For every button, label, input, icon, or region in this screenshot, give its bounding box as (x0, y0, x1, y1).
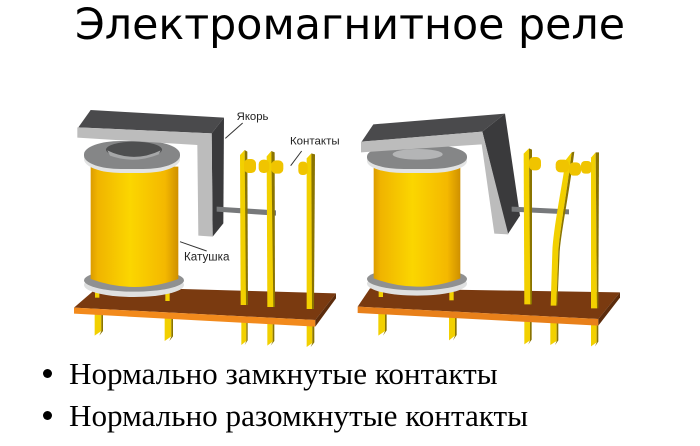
label: armature (225, 111, 269, 138)
bullet: normally closed contacts: Нормально замкнутые контакты (69, 356, 498, 391)
label: coil (180, 242, 230, 263)
coil (367, 145, 467, 296)
actuator rod (512, 207, 569, 214)
contact springs and contacts (524, 148, 599, 308)
upper pins (95, 292, 170, 301)
label: coil: Катушка (184, 250, 230, 263)
contact springs and contacts (240, 150, 315, 309)
label: armature: Якорь (237, 111, 269, 123)
diagram: normally closed relay (74, 110, 340, 347)
lower pins (95, 312, 314, 347)
base board (74, 287, 336, 327)
lower pins (378, 312, 598, 346)
base board (358, 288, 620, 326)
upper pins (379, 290, 454, 300)
bullet: normally open contacts: Нормально разомкнутые контакты (69, 398, 528, 433)
coil (84, 141, 184, 297)
label: contacts (290, 135, 340, 166)
label: contacts: Контакты (290, 135, 340, 147)
armature (361, 114, 520, 234)
diagram: normally open relay (358, 114, 620, 346)
actuator rod (217, 207, 276, 216)
armature (77, 110, 224, 237)
title: Электромагнитное реле (75, 0, 625, 50)
